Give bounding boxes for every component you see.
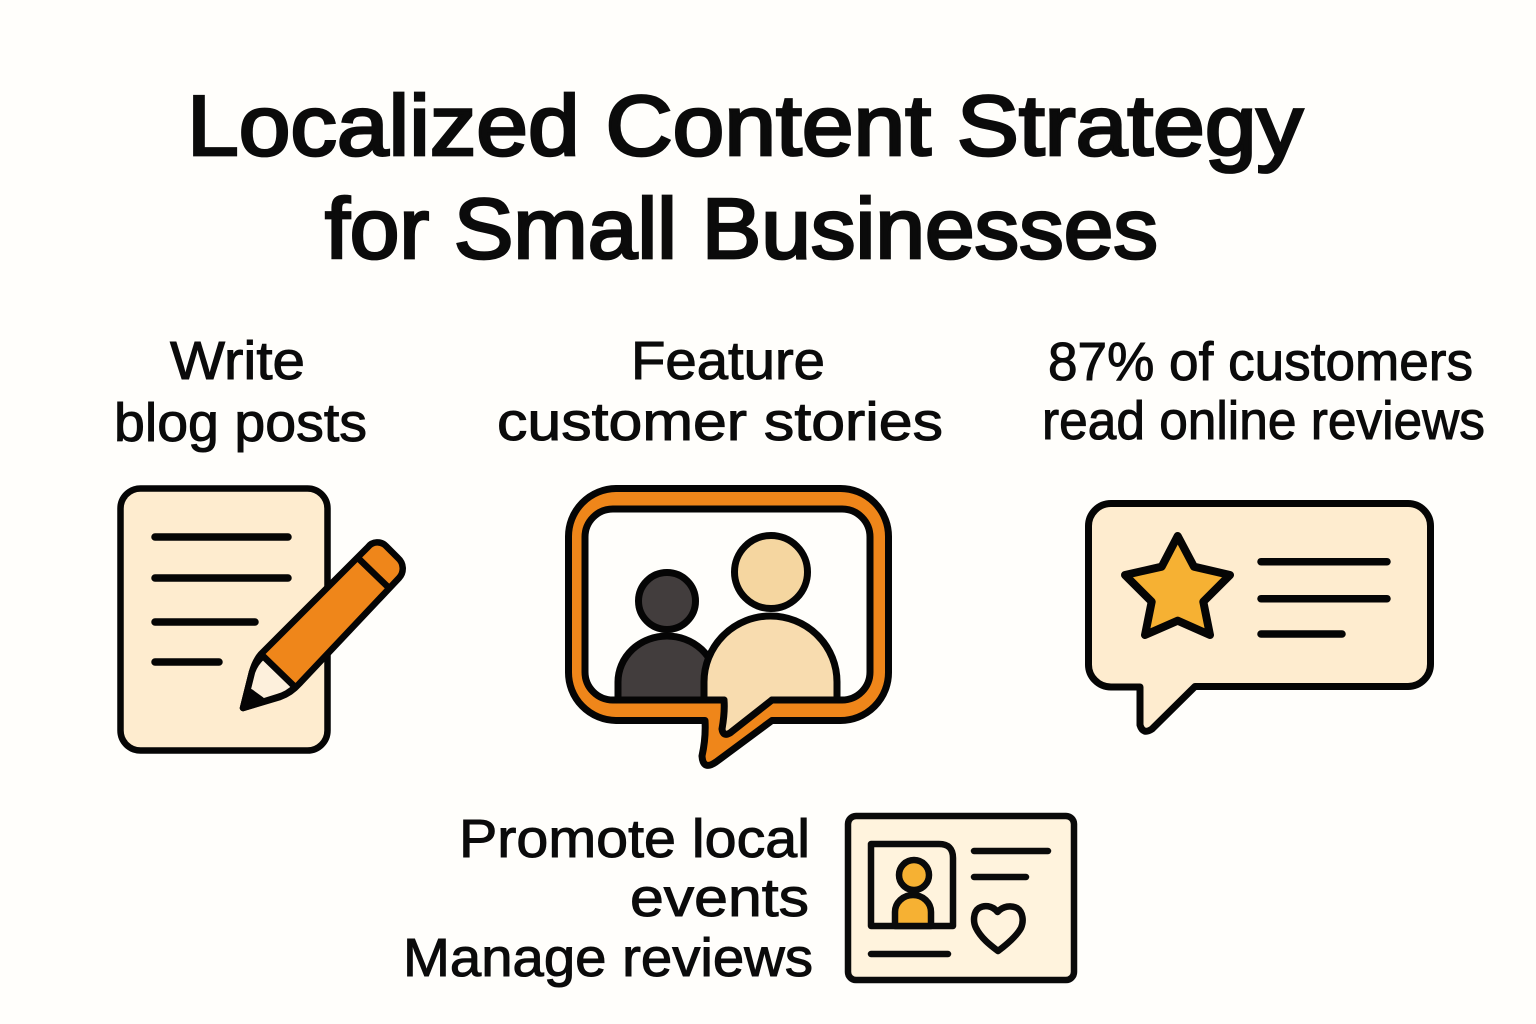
heading: 87% of customers read online reviews: read online reviews bbox=[1042, 391, 1485, 451]
title bbox=[187, 79, 1304, 277]
heading: promote local events, manage reviews: events bbox=[630, 868, 809, 928]
heading: promote local events, manage reviews: Promote local bbox=[459, 809, 810, 869]
heading: write blog posts: blog posts bbox=[114, 393, 367, 453]
icon: customers in speech bubble bbox=[568, 488, 889, 765]
heading: 87% of customers read online reviews: 87% of customers bbox=[1048, 332, 1473, 392]
icon: profile card with heart bbox=[848, 816, 1074, 980]
heading: feature customer stories: Feature bbox=[631, 331, 825, 391]
heading: feature customer stories bbox=[497, 331, 943, 452]
panel: promote events and manage reviews bbox=[403, 809, 1074, 988]
heading: write blog posts: Write bbox=[170, 331, 305, 391]
heading: 87% of customers read online reviews bbox=[1042, 332, 1485, 451]
title: for Small Businesses bbox=[325, 182, 1158, 277]
heading: promote local events, manage reviews: Manage reviews bbox=[403, 928, 813, 988]
title: Localized Content Strategy bbox=[187, 79, 1304, 174]
panel: write blog posts bbox=[114, 331, 403, 750]
heading: write blog posts bbox=[114, 331, 367, 453]
heading: promote local events, manage reviews bbox=[403, 809, 813, 988]
panel: feature customer stories bbox=[497, 331, 943, 765]
heading: feature customer stories: customer stories bbox=[497, 392, 943, 452]
icon: review bubble with star bbox=[1088, 504, 1430, 731]
icon: document with pencil bbox=[120, 488, 403, 750]
panel: online reviews statistic bbox=[1042, 332, 1485, 731]
